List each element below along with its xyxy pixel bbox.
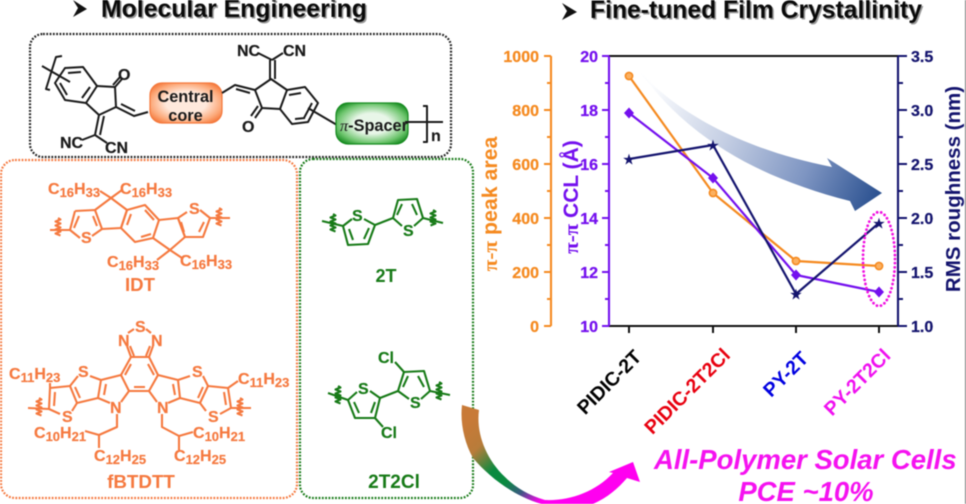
- left axis: CCL: [559, 49, 609, 336]
- x label: PY-2T2Cl: PY-2T2Cl: [820, 345, 895, 420]
- left axis: pi-pi peak area: π-π peak area: [478, 137, 502, 271]
- fBTDTT structure: H: [34, 366, 46, 383]
- IDT structure: 16: [119, 258, 133, 273]
- series: navy roughness: ★: [789, 286, 803, 304]
- pi-spacer box: π-Spacer: [340, 116, 409, 135]
- x label: PY-2T: PY-2T: [759, 348, 813, 402]
- fBTDTT structure: 10: [205, 429, 219, 444]
- right acceptor unit: O: [242, 119, 254, 136]
- fBTDTT structure: N: [151, 333, 163, 350]
- right axis: RMS roughness: 3.0: [911, 103, 933, 120]
- fBTDTT structure: N: [118, 333, 130, 350]
- fBTDTT structure: 25: [132, 452, 146, 467]
- IDT structure: C: [120, 181, 132, 198]
- central core box: core: [168, 107, 203, 125]
- x label: PIDIC-2T2Cl: PIDIC-2T2Cl: [640, 344, 735, 439]
- fBTDTT structure: S: [78, 364, 89, 381]
- left axis: pi-pi peak area: 0: [530, 319, 539, 336]
- left axis: pi-pi peak area: 600: [512, 157, 539, 174]
- plot frame: [609, 56, 898, 333]
- fBTDTT structure: 11: [250, 375, 263, 390]
- right edge line: [965, 0, 966, 504]
- series: orange peak area: [625, 72, 883, 270]
- series: navy roughness: [622, 136, 886, 304]
- fBTDTT structure: H: [219, 425, 231, 442]
- 2T structure: S: [403, 223, 414, 240]
- right acceptor unit: NC: [237, 43, 261, 60]
- fBTDTT structure: S: [62, 409, 73, 426]
- 2T2Cl structure: Cl: [378, 350, 394, 367]
- series: navy roughness: ★: [622, 150, 636, 168]
- chart: crystallinity and roughness: [478, 49, 965, 336]
- left axis: CCL: 12: [580, 265, 598, 282]
- IDT structure: 33: [158, 185, 172, 200]
- IDT structure: 16: [60, 185, 74, 200]
- dotted highlight ellipse: [863, 212, 895, 306]
- IDT structure: H: [133, 254, 145, 271]
- left axis: pi-pi peak area: [478, 49, 551, 336]
- left acceptor unit: CN: [105, 140, 128, 157]
- fBTDTT structure: C: [193, 425, 205, 442]
- fBTDTT structure: 21: [72, 429, 86, 444]
- fBTDTT structure: C: [174, 448, 186, 465]
- central core box: [150, 83, 222, 125]
- right axis: RMS roughness: 3.5: [911, 49, 933, 66]
- fBTDTT structure: H: [120, 448, 132, 465]
- 2T2Cl structure: S: [358, 381, 369, 398]
- left axis: pi-pi peak area: 400: [512, 211, 539, 228]
- left axis: CCL: 20: [580, 49, 598, 66]
- IDT structure: H: [206, 253, 218, 270]
- IDT structure: C: [107, 254, 119, 271]
- repeat bracket n: n: [431, 128, 441, 145]
- fBTDTT structure: 12: [186, 452, 200, 467]
- IDT structure: 16: [132, 185, 146, 200]
- right acceptor unit: CN: [283, 43, 306, 60]
- IDT structure: H: [74, 181, 86, 198]
- 2T label: 2T: [375, 266, 397, 286]
- pi-spacer box: [336, 103, 409, 144]
- right axis: RMS roughness: 2.0: [911, 211, 933, 228]
- left axis: CCL: 14: [580, 211, 598, 228]
- IDT structure: 16: [192, 257, 206, 272]
- fBTDTT structure: 10: [46, 429, 60, 444]
- fBTDTT structure: [9, 319, 289, 467]
- trend arrow: [640, 72, 882, 211]
- fBTDTT structure: S: [135, 319, 146, 336]
- right axis: RMS roughness: [898, 49, 965, 336]
- left axis: CCL: 16: [580, 157, 598, 174]
- fBTDTT structure: 11: [21, 370, 34, 385]
- left axis: CCL: 18: [580, 103, 598, 120]
- IDT structure: H: [146, 181, 158, 198]
- panel: green spacer units: [300, 159, 473, 498]
- fBTDTT structure: S: [208, 409, 219, 426]
- right axis: RMS roughness: 1.5: [911, 265, 933, 282]
- IDT structure: S: [81, 230, 92, 247]
- left axis: CCL: π-π CCL (Å): [559, 140, 583, 254]
- fBTDTT structure: 21: [231, 429, 245, 444]
- IDT structure: C: [180, 253, 192, 270]
- curved gradient arrow: [461, 405, 640, 504]
- 2T2Cl structure: S: [410, 395, 421, 412]
- left axis: pi-pi peak area: 200: [512, 265, 539, 282]
- callout: all-polymer solar cells: [653, 444, 957, 504]
- IDT structure: 33: [218, 257, 232, 272]
- series: navy roughness: ★: [872, 214, 886, 232]
- callout: all-polymer solar cells: All-Polymer Solar Cells: [653, 444, 957, 475]
- central core box: Central: [157, 88, 214, 106]
- series: purple CCL: [624, 108, 884, 298]
- 2T structure: S: [352, 208, 363, 225]
- left acceptor unit: NC: [60, 135, 84, 152]
- right acceptor unit: [222, 43, 337, 136]
- fBTDTT structure: H: [263, 371, 275, 388]
- fBTDTT structure: N: [110, 400, 122, 417]
- fBTDTT structure: C: [94, 448, 106, 465]
- left axis: CCL: 10: [580, 319, 598, 336]
- fBTDTT structure: N: [157, 400, 169, 417]
- IDT label: IDT: [125, 274, 156, 295]
- left acceptor unit: O: [118, 67, 130, 84]
- fBTDTT structure: S: [192, 364, 203, 381]
- fBTDTT structure: C: [238, 371, 250, 388]
- 2T structure: [322, 199, 443, 245]
- IDT structure: S: [189, 201, 200, 218]
- panel: orange donor units: [1, 160, 297, 498]
- IDT structure: C: [48, 181, 60, 198]
- right axis: RMS roughness: 1.0: [911, 319, 933, 336]
- fBTDTT structure: 23: [46, 370, 60, 385]
- x label: PIDIC-2T: PIDIC-2T: [573, 346, 646, 419]
- IDT structure: 33: [145, 258, 159, 273]
- fBTDTT structure: C: [34, 425, 46, 442]
- fBTDTT structure: H: [200, 448, 212, 465]
- 2T2Cl structure: Cl: [381, 425, 397, 442]
- right axis: RMS roughness: RMS roughness (nm): [942, 86, 965, 292]
- fBTDTT structure: C: [9, 366, 21, 383]
- IDT structure: 33: [86, 185, 100, 200]
- fBTDTT structure: 25: [212, 452, 226, 467]
- fBTDTT label: fBTDTT: [107, 471, 175, 492]
- panel: polymer backbone structure: [30, 34, 451, 157]
- fBTDTT structure: H: [60, 425, 72, 442]
- fBTDTT structure: 12: [106, 452, 120, 467]
- IDT structure: [48, 181, 232, 273]
- right axis: RMS roughness: 2.5: [911, 157, 933, 174]
- left axis: pi-pi peak area: 1000: [503, 49, 539, 66]
- 2T2Cl label: 2T2Cl: [368, 472, 420, 493]
- fBTDTT structure: 23: [275, 375, 289, 390]
- left acceptor unit: [42, 56, 148, 157]
- 2T2Cl structure: [328, 350, 450, 442]
- left axis: pi-pi peak area: 800: [512, 103, 539, 120]
- series: navy roughness: ★: [706, 136, 720, 154]
- repeat bracket n: [405, 106, 443, 145]
